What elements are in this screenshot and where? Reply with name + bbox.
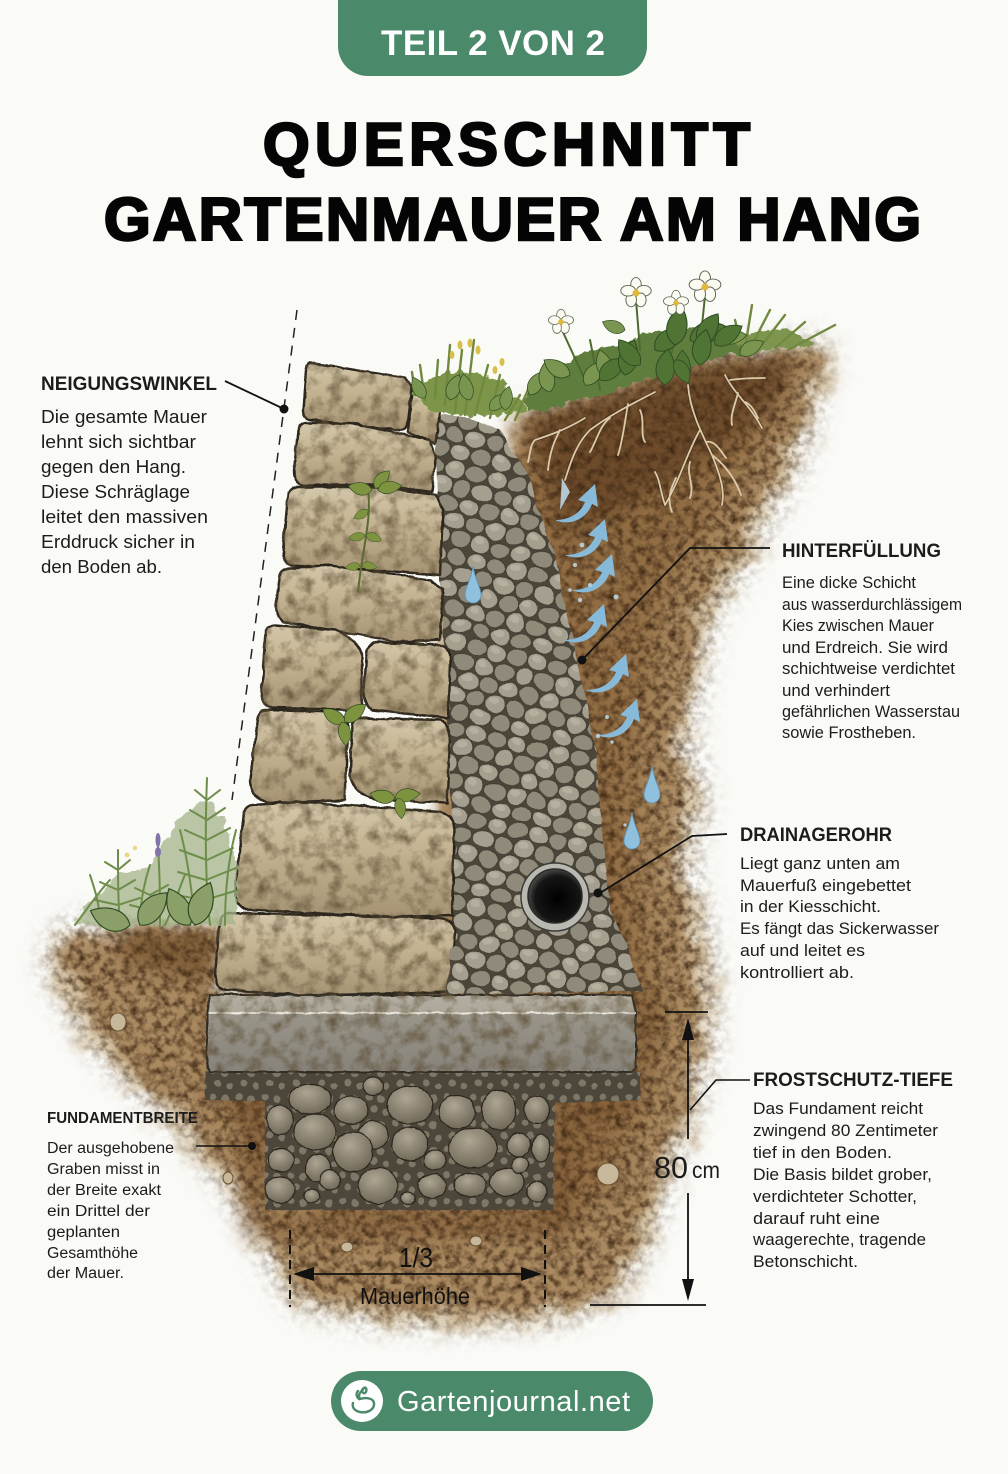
callout: Neigungswinkel: lehnt sich sichtbar: [41, 431, 196, 452]
callout: Fundamentbreite: [47, 1110, 256, 1282]
callout: Drainagerohr: in der Kiesschicht.: [740, 898, 881, 916]
callout: Neigungswinkel: NEIGUNGSWINKEL: [41, 374, 217, 395]
wall vines: [319, 467, 421, 820]
title: QUERSCHNITT: [263, 111, 750, 178]
grasses: [412, 296, 835, 420]
width dimension: 1/3 Mauerhöhe: [290, 1230, 545, 1309]
callout: Fundamentbreite: der Breite exakt: [47, 1182, 162, 1199]
callout: Frostschutz-Tiefe: Die Basis bildet grober,: [753, 1166, 932, 1184]
callout: Neigungswinkel: [41, 374, 288, 577]
callout: Drainagerohr: auf und leitet es: [740, 942, 865, 960]
depth dimension: 80 cm: [590, 1012, 720, 1305]
callout: Fundamentbreite: der Mauer.: [47, 1265, 124, 1282]
width dimension: 1/3 Mauerhöhe: Mauerhöhe: [360, 1283, 470, 1309]
water drops: [465, 566, 660, 849]
compacted gravel and trench: [205, 1072, 640, 1210]
callout: Hinterfüllung: Kies zwischen Mauer: [782, 617, 934, 635]
depth dimension: 80 cm: cm: [692, 1157, 720, 1183]
drainage pipe: [521, 863, 589, 931]
callout: Hinterfüllung: gefährlichen Wasserstau: [782, 703, 960, 721]
callout: Frostschutz-Tiefe: darauf ruht eine: [753, 1210, 880, 1228]
callout: Drainagerohr: Liegt ganz unten am: [740, 855, 900, 873]
header pill: TEIL 2 VON 2: [381, 24, 605, 63]
callout: Frostschutz-Tiefe: zwingend 80 Zentimeter: [753, 1122, 939, 1140]
callout: Neigungswinkel: gegen den Hang.: [41, 456, 186, 477]
footer brand pill: [331, 1371, 653, 1431]
yellow buds: [450, 338, 504, 374]
drainage pipe bed: [445, 905, 642, 994]
callout: Fundamentbreite: geplanten: [47, 1224, 120, 1241]
callout: Hinterfüllung: Eine dicke Schicht: [782, 574, 916, 592]
callout: Hinterfüllung: schichtweise verdichtet: [782, 660, 955, 678]
callout: Frostschutz-Tiefe: FROSTSCHUTZ-TIEFE: [753, 1070, 953, 1091]
left plants: [75, 778, 238, 936]
callout: Frostschutz-Tiefe: Betonschicht.: [753, 1253, 858, 1271]
callout: Neigungswinkel: den Boden ab.: [41, 556, 162, 577]
title: [104, 111, 921, 253]
callout: Frostschutz-Tiefe: Das Fundament reicht: [753, 1100, 923, 1118]
header pill: [338, 0, 647, 76]
soil pebbles: [110, 1013, 619, 1252]
callout: Hinterfüllung: und verhindert: [782, 682, 890, 700]
title: GARTENMAUER AM HANG: [104, 186, 921, 253]
concrete foundation: [207, 995, 636, 1072]
soil cross-section: [45, 342, 838, 1325]
callout: Fundamentbreite: ein Drittel der: [47, 1203, 150, 1220]
footer brand pill: Gartenjournal.net: [397, 1386, 630, 1418]
width dimension: 1/3 Mauerhöhe: 1/3: [399, 1242, 433, 1273]
callout: Hinterfüllung: sowie Frostheben.: [782, 724, 916, 742]
callout: Fundamentbreite: FUNDAMENTBREITE: [47, 1110, 198, 1127]
callout: Frostschutz-Tiefe: [690, 1070, 953, 1271]
callout: Hinterfüllung: aus wasserdurchlässigem: [782, 596, 962, 614]
callout: Neigungswinkel: leitet den massiven: [41, 506, 208, 527]
callout: Neigungswinkel: Diese Schräglage: [41, 481, 190, 502]
callout: Fundamentbreite: Gesamthöhe: [47, 1245, 138, 1262]
callout: Neigungswinkel: Die gesamte Mauer: [41, 406, 207, 427]
callout: Frostschutz-Tiefe: verdichteter Schotter,: [753, 1188, 917, 1206]
callout: Drainagerohr: Es fängt das Sickerwasser: [740, 920, 940, 938]
callout: Drainagerohr: DRAINAGEROHR: [740, 825, 892, 846]
leaves: [407, 317, 766, 414]
callout: Drainagerohr: kontrolliert ab.: [740, 964, 854, 982]
foliage mass: [413, 327, 815, 416]
trench stones: [265, 1077, 550, 1204]
callout: Hinterfüllung: HINTERFÜLLUNG: [782, 541, 941, 562]
callout: Hinterfüllung: [578, 541, 962, 742]
callout: Neigungswinkel: Erddruck sicher in: [41, 531, 195, 552]
depth dimension: 80 cm: 80: [654, 1150, 688, 1185]
callout: Frostschutz-Tiefe: tief in den Boden.: [753, 1144, 892, 1162]
blue water arrows: [555, 478, 640, 827]
stone wall: [215, 363, 455, 995]
white flowers: [621, 278, 651, 307]
callout: Fundamentbreite: Der ausgehobene: [47, 1140, 174, 1157]
callout: Drainagerohr: [594, 825, 940, 982]
gravel backfill: [436, 415, 642, 994]
callout: Fundamentbreite: Graben misst in: [47, 1161, 160, 1178]
tilt angle dashed guide: [232, 310, 297, 800]
callout: Hinterfüllung: und Erdreich. Sie wird: [782, 639, 948, 657]
icon: plant logo: [341, 1380, 383, 1422]
callout: Frostschutz-Tiefe: waagerechte, tragende: [752, 1231, 926, 1249]
top plants: [407, 271, 835, 420]
roots: [528, 375, 765, 512]
callout: Drainagerohr: Mauerfuß eingebettet: [740, 877, 911, 895]
